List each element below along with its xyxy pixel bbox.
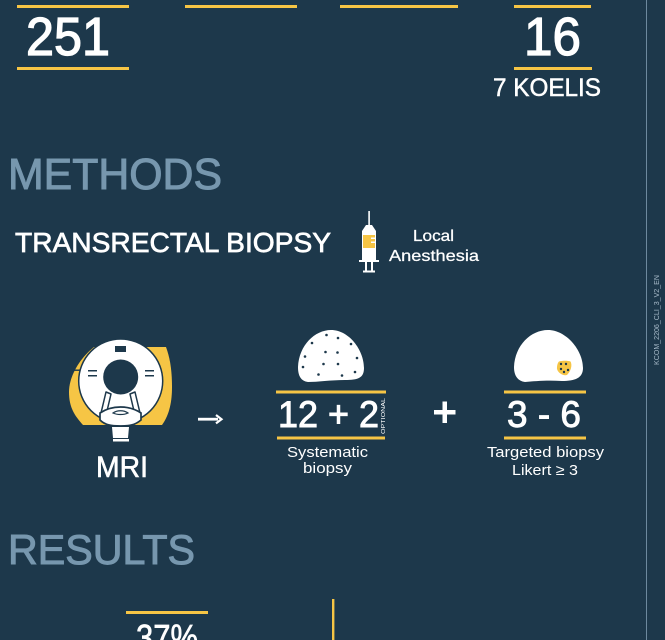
- rule: third column: [340, 5, 458, 8]
- vertical divider: [332, 599, 334, 640]
- stat: 16, 7 KOELIS: 7 KOELIS: [493, 74, 601, 102]
- text: systematic biopsy: biopsy: [303, 460, 353, 477]
- icon: syringe: [359, 211, 379, 272]
- text: targeted biopsy likert: Targeted biopsy: [487, 444, 605, 461]
- heading: transrectal biopsy: TRANSRECTAL BIOPSY: [15, 227, 331, 258]
- text: local anesthesia: [389, 228, 479, 265]
- heading: results: RESULTS: [8, 526, 195, 573]
- side code: KCOM_2206_CLI_3_V2_EN: [654, 275, 661, 365]
- stat: 12 + 2 optional: OPTIONAL: [381, 398, 387, 434]
- icon: prostate with systematic biopsy points: [298, 330, 364, 382]
- stat: 16, 7 KOELIS: 16: [524, 7, 581, 67]
- text: local anesthesia: Anesthesia: [389, 248, 479, 265]
- plus sign: [434, 402, 456, 423]
- stat: 251: 251: [26, 7, 110, 67]
- stat: 16, 7 KOELIS: [493, 5, 601, 102]
- text: targeted biopsy likert: [487, 444, 605, 479]
- text: systematic biopsy: [287, 444, 369, 477]
- label: MRI: MRI: [96, 451, 148, 484]
- arrow: [198, 415, 222, 423]
- heading: methods: METHODS: [8, 150, 222, 199]
- stat: 3 - 6: 3 - 6: [507, 394, 581, 435]
- rule: second column: [185, 5, 297, 8]
- stat: 37%: [126, 611, 208, 640]
- icon: prostate with target lesion: [514, 330, 583, 382]
- text: systematic biopsy: Systematic: [287, 444, 369, 461]
- text: targeted biopsy likert: Likert ≥ 3: [512, 462, 578, 479]
- icon: MRI scanner: [69, 339, 172, 442]
- text: local anesthesia: Local: [413, 228, 454, 245]
- stat: 12 + 2 optional: 12 + 2: [278, 394, 379, 435]
